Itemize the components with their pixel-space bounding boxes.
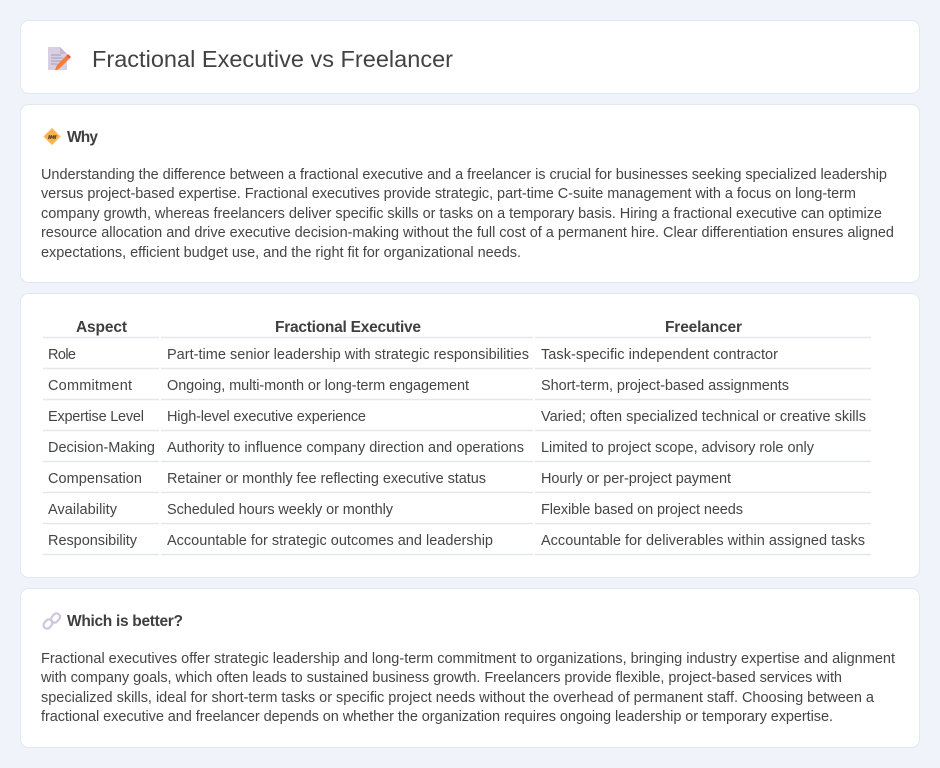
row: compensation: Retainer or monthly fee reflecting executive status bbox=[167, 471, 486, 487]
table header: Fractional Executive bbox=[275, 319, 421, 336]
row: decision-making bbox=[48, 440, 815, 456]
row: expertise level bbox=[48, 409, 866, 425]
heading: which is better: Which is better? bbox=[67, 613, 183, 630]
row: availability: Availability bbox=[48, 502, 118, 518]
panel: why bbox=[20, 104, 920, 282]
table header: Freelancer bbox=[665, 319, 742, 336]
panel: which is better bbox=[20, 588, 920, 748]
text block: which is better body: specialized skills, ideal for short-term tasks or specific project needs without the overhead of permanent staff. Choosing between a bbox=[41, 690, 875, 706]
row: compensation: Hourly or per-project payment bbox=[541, 471, 731, 487]
row: role bbox=[48, 347, 778, 363]
title: Fractional Executive vs Freelancer bbox=[92, 46, 453, 72]
heading: why: Why bbox=[67, 129, 98, 146]
icon: chain link bbox=[42, 612, 61, 630]
row: commitment: Short-term, project-based assignments bbox=[541, 378, 789, 394]
text block: which is better body bbox=[40, 651, 895, 725]
row: role: Part-time senior leadership with strategic responsibilities bbox=[167, 347, 529, 363]
row: availability: Flexible based on project needs bbox=[541, 502, 743, 518]
row: role: Role bbox=[48, 347, 76, 363]
row: role: Task-specific independent contractor bbox=[541, 347, 778, 363]
row: decision-making: Authority to influence company direction and operations bbox=[167, 440, 524, 456]
text block: why body: Understanding the difference between a fractional executive and a freelancer is crucial for businesses seeking specialized leadership bbox=[41, 167, 887, 183]
row: expertise level: Expertise Level bbox=[48, 409, 144, 425]
table header bbox=[76, 319, 742, 336]
row: responsibility: Responsibility bbox=[48, 533, 138, 549]
row: commitment: Commitment bbox=[48, 378, 132, 394]
text block: which is better body: fractional executive and freelancer depends on whether the organization requires ongoing leadership or temporary expertise. bbox=[41, 709, 833, 725]
row: responsibility bbox=[48, 533, 865, 549]
panel: comparison table bbox=[20, 294, 920, 578]
row: expertise level: High-level executive experience bbox=[167, 409, 366, 425]
text block: why body: company growth, whereas freelancers deliver specific skills or tasks on a temporary basis. Hiring a fractional executive can optimize bbox=[41, 206, 882, 222]
row: availability bbox=[48, 502, 743, 518]
row: commitment: Ongoing, multi-month or long-term engagement bbox=[167, 378, 469, 394]
row: commitment bbox=[48, 378, 789, 394]
row: expertise level: Varied; often specialized technical or creative skills bbox=[541, 409, 866, 425]
row: compensation: Compensation bbox=[48, 471, 142, 487]
text block: why body bbox=[41, 167, 894, 261]
row: decision-making: Decision-Making bbox=[48, 440, 155, 456]
row: decision-making: Limited to project scope, advisory role only bbox=[541, 440, 815, 456]
icon: document with pencil bbox=[48, 47, 71, 70]
row: responsibility: Accountable for strategic outcomes and leadership bbox=[167, 533, 493, 549]
panel: title header bbox=[20, 20, 920, 94]
text block: which is better body: Fractional executives offer strategic leadership and long-term commitment to organizations, bringing industry expertise and alignment bbox=[41, 651, 895, 667]
icon: diamond sign bbox=[44, 128, 60, 144]
row: availability: Scheduled hours weekly or monthly bbox=[167, 502, 394, 518]
table header: Aspect bbox=[76, 319, 127, 336]
row: responsibility: Accountable for deliverables within assigned tasks bbox=[541, 533, 865, 549]
text block: why body: resource allocation and drive executive decision-making without the full cost of a permanent hire. Clear differentiation ensures aligned bbox=[41, 225, 894, 241]
text block: why body: expectations, efficient budget use, and the right fit for organizational needs. bbox=[41, 245, 521, 261]
text block: which is better body: with company goals, which often leads to sustained business growth. Freelancers provide flexible, project-based services with bbox=[40, 670, 842, 686]
text block: why body: versus project-based expertise. Fractional executives provide strategic, part-time C-suite management with a focus on long-term bbox=[41, 186, 856, 202]
row: compensation bbox=[48, 471, 731, 487]
